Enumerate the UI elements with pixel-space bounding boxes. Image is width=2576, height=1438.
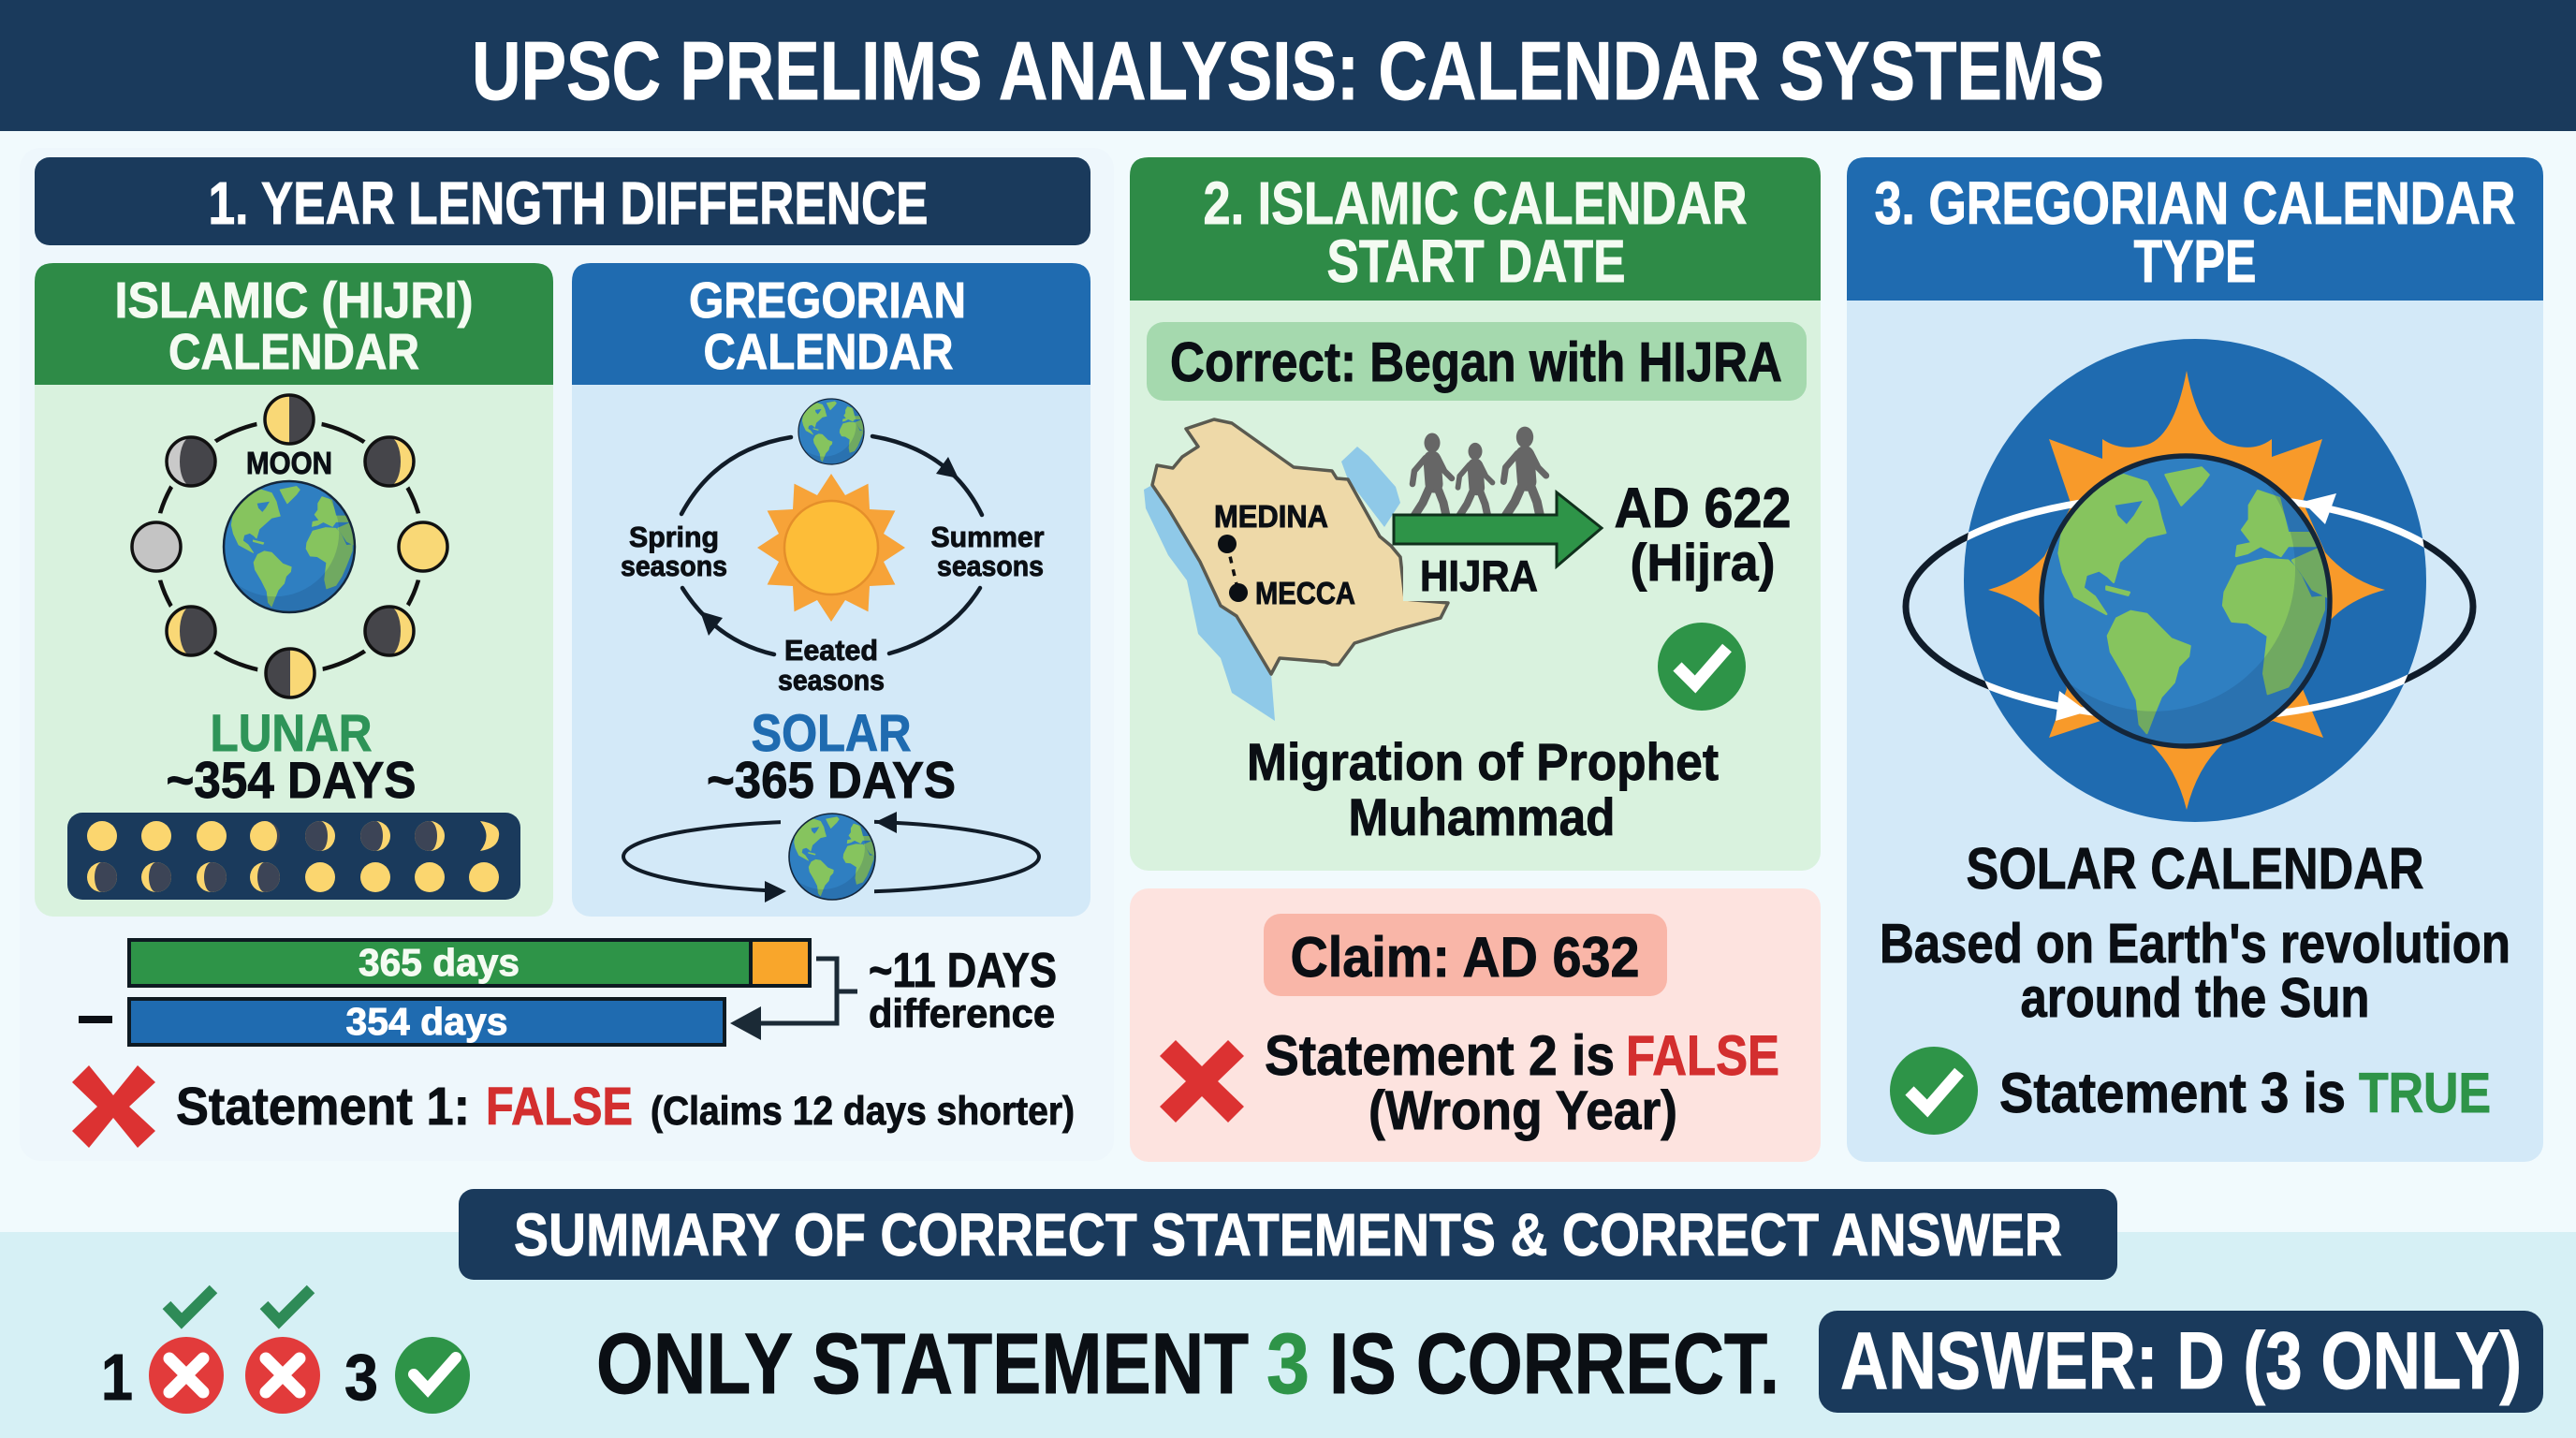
earth revolution diagram <box>623 805 1039 902</box>
panel: Islamic calendar start date <box>1130 157 1821 871</box>
icon: green check <box>1658 623 1746 711</box>
bar comparison: 365 vs 354 days: 354 days <box>346 1000 507 1043</box>
verdict: statement 2 false: FALSE <box>1626 1024 1779 1087</box>
label: AD 622 Hijra: AD 622 <box>1614 477 1792 539</box>
verdict: statement 3 true: TRUE <box>2359 1062 2491 1124</box>
illustration: earth orbiting the sun <box>1906 339 2473 822</box>
panel: claim AD 632 <box>1130 888 1821 1162</box>
heading: Islamic calendar start date: 2. ISLAMIC CALENDAR <box>1204 169 1747 237</box>
conclusion text: 3 <box>1266 1316 1310 1412</box>
text: migration of Prophet Muhammad: Migration of Prophet <box>1247 732 1719 791</box>
callout: correct began with Hijra: Correct: Began with HIJRA <box>1170 331 1782 393</box>
heading: summary: SUMMARY OF CORRECT STATEMENTS & CORRECT ANSWER <box>514 1201 2062 1269</box>
label: solar 365 days: SOLAR <box>751 703 912 762</box>
panel: Gregorian calendar type <box>1847 157 2543 1162</box>
card: Islamic calendar: ISLAMIC (HIJRI) <box>114 272 474 329</box>
verdict: statement 2 false <box>1265 1024 1779 1141</box>
arrow: Hijra migration <box>1394 492 1602 566</box>
heading: Gregorian calendar type <box>1874 169 2516 295</box>
icon: red cross <box>72 1065 155 1148</box>
bar comparison: 365 vs 354 days <box>79 940 1057 1045</box>
text: solar calendar description: around the Sun <box>2020 967 2370 1029</box>
panel: year length difference <box>20 148 1114 1161</box>
label: 11 days difference <box>869 944 1057 1036</box>
icon: migrating people <box>1412 427 1546 516</box>
card: Islamic calendar: CALENDAR <box>168 324 419 380</box>
label: AD 622 Hijra: (Hijra) <box>1631 533 1775 592</box>
text: solar calendar description: SOLAR CALENDAR <box>1966 837 2424 902</box>
text: solar calendar description <box>1880 837 2510 1029</box>
label: Hijra: HIJRA <box>1420 551 1538 600</box>
moon phase orbit diagram: MOON <box>246 446 332 480</box>
conclusion text <box>596 1316 1779 1412</box>
label: lunar 354 days: LUNAR <box>210 703 373 762</box>
label: 11 days difference: difference <box>869 991 1055 1036</box>
verdict: statement 2 false: (Wrong Year) <box>1368 1080 1677 1141</box>
text: migration of Prophet Muhammad: Muhammad <box>1348 787 1616 846</box>
solar orbit diagram: Eeated <box>784 634 878 667</box>
heading: Islamic calendar start date: START DATE <box>1327 227 1625 295</box>
map: Arabian peninsula: MECCA <box>1255 576 1355 610</box>
label: lunar 354 days: ~354 DAYS <box>167 751 416 809</box>
label: lunar 354 days <box>167 703 416 809</box>
verdict: statement 3 true <box>1890 1047 2491 1135</box>
conclusion text: IS CORRECT. <box>1329 1316 1779 1412</box>
solar orbit diagram: seasons <box>937 550 1044 582</box>
bar comparison: 365 vs 354 days: 365 days <box>359 941 520 984</box>
title banner: UPSC PRELIMS ANALYSIS: CALENDAR SYSTEMS <box>472 24 2104 117</box>
card: Gregorian calendar <box>572 263 1090 917</box>
label: AD 622 Hijra <box>1614 477 1792 592</box>
verdict: statement 2 false: Statement 2 is <box>1265 1024 1615 1087</box>
moon phase orbit diagram <box>123 387 457 706</box>
solar orbit diagram: Spring <box>629 521 719 553</box>
map: Arabian peninsula <box>1144 419 1553 721</box>
statement status icons: 1 <box>101 1341 133 1414</box>
label: 11 days difference: ~11 DAYS <box>869 944 1057 998</box>
conclusion text: ONLY STATEMENT <box>596 1316 1249 1412</box>
heading: summary <box>459 1189 2117 1280</box>
panel: summary band <box>0 1189 2576 1438</box>
heading: Islamic calendar start date <box>1204 169 1747 295</box>
heading: year length difference <box>35 157 1090 245</box>
text: migration of Prophet Muhammad <box>1247 732 1719 846</box>
heading: Gregorian calendar type: TYPE <box>2134 227 2256 295</box>
solar orbit diagram: seasons <box>778 664 885 697</box>
solar orbit diagram <box>621 392 1045 697</box>
card: Gregorian calendar: CALENDAR <box>704 324 953 380</box>
card: Gregorian calendar: GREGORIAN <box>689 272 966 329</box>
callout: claim: Claim: AD 632 <box>1290 926 1640 989</box>
verdict: statement 3 true: Statement 3 is <box>1999 1062 2346 1124</box>
solar orbit diagram: seasons <box>621 550 727 582</box>
solar orbit diagram: Summer <box>930 521 1045 553</box>
heading: year length difference: 1. YEAR LENGTH DIFFERENCE <box>208 169 929 237</box>
bracket arrow <box>730 959 857 1040</box>
title banner <box>0 0 2576 131</box>
map: Arabian peninsula: MEDINA <box>1214 499 1328 534</box>
card: Islamic calendar <box>35 263 553 917</box>
moon phase strip <box>67 813 520 900</box>
verdict: statement 1 false: Statement 1: <box>176 1077 470 1137</box>
statement status icons <box>101 1289 470 1414</box>
verdict: statement 1 false: FALSE <box>486 1077 633 1137</box>
icon: red cross <box>1160 1040 1244 1123</box>
statement status icons: 3 <box>344 1341 378 1414</box>
verdict: statement 1 false <box>72 1065 1075 1148</box>
label: solar 365 days <box>707 703 956 809</box>
label: solar 365 days: ~365 DAYS <box>707 751 956 809</box>
verdict: statement 1 false: (Claims 12 days shorter) <box>651 1089 1075 1134</box>
